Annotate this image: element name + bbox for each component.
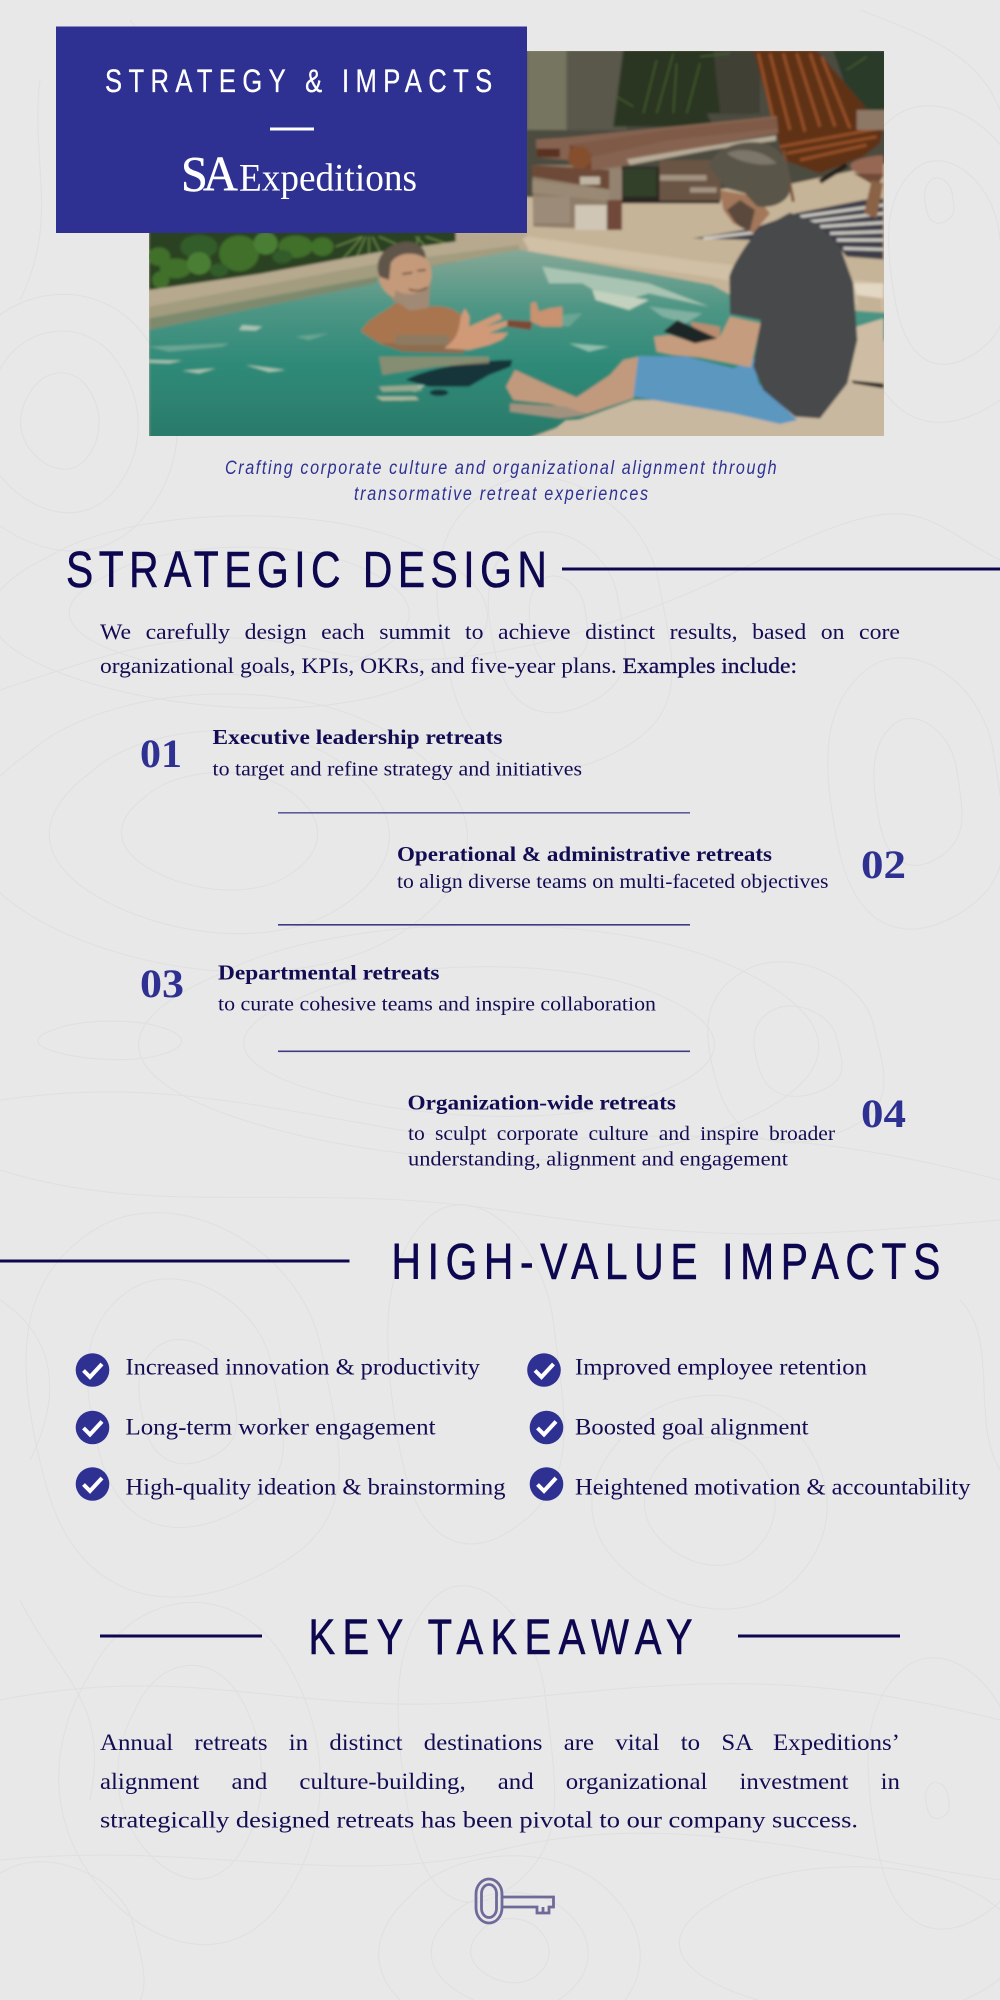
item 04: [408, 1090, 906, 1170]
check: ideation: [76, 1467, 506, 1501]
check: engagement: [76, 1411, 436, 1444]
foreground deck: [528, 378, 884, 436]
item 03: Departmental retreats: [218, 960, 440, 984]
shorts: [633, 356, 797, 424]
stool: [851, 156, 883, 176]
chair: [753, 50, 883, 173]
photo: two men talking at a swimming pool: [148, 50, 896, 440]
check: motivation: Heightened motivation & accountability: [575, 1474, 971, 1500]
ripples: [149, 267, 709, 401]
heading: strategic design: [66, 541, 1000, 598]
key takeaway text: Annual retreats in distinct destinations are vital to SA Expeditions’: [100, 1730, 900, 1755]
leg and foot: [506, 357, 638, 414]
item 01: to target and refine strategy and initiatives: [212, 758, 582, 780]
wall and plants: [500, 50, 887, 197]
check: engagement: Long-term worker engagement: [126, 1414, 436, 1440]
item 01: Executive leadership retreats: [212, 725, 502, 749]
header panel: [56, 26, 527, 233]
pool water: [149, 249, 896, 440]
item 01: 01: [140, 731, 182, 776]
item 02: 02: [861, 842, 906, 887]
check: innovation: Increased innovation & productivity: [126, 1354, 481, 1380]
item 03: [140, 960, 656, 1016]
tablet: [663, 320, 717, 343]
heading: high-value impacts: [0, 1233, 940, 1290]
check: retention: Improved employee retention: [575, 1354, 868, 1380]
reflection: [406, 360, 512, 387]
plants: [149, 230, 456, 290]
check: alignment: [530, 1411, 809, 1444]
item 04: 04: [861, 1091, 906, 1136]
key takeaway text: [100, 1728, 900, 1832]
logo: [181, 146, 417, 202]
icon: key: [476, 1879, 554, 1923]
heading: strategic design: STRATEGIC DESIGN: [66, 541, 547, 598]
heading: key takeaway: KEY TAKEAWAY: [308, 1609, 693, 1665]
shirt: [729, 213, 857, 418]
strategic design intro text: organizational goals, KPIs, OKRs, and five-year plans. Examples include:: [100, 653, 797, 678]
title: STRATEGY & IMPACTS: [105, 64, 492, 100]
bench leg: [532, 165, 622, 230]
item 02: [397, 842, 906, 893]
heading: high-value impacts: HIGH-VALUE IMPACTS: [392, 1233, 940, 1290]
check: alignment: Boosted goal alignment: [575, 1414, 809, 1440]
item 04: understanding, alignment and engagement: [408, 1148, 788, 1170]
logo: Expeditions: [239, 156, 417, 200]
arm and hands: [654, 317, 761, 367]
strategic design intro text: [100, 617, 900, 678]
man in pool: [361, 303, 472, 345]
left coping: [149, 238, 528, 306]
bench top: [536, 116, 778, 171]
check: innovation: [76, 1353, 481, 1387]
back deck and coping: [524, 237, 864, 304]
floor: [608, 162, 884, 314]
item 04: Organization-wide retreats: [408, 1090, 676, 1114]
hands: [444, 308, 508, 350]
check: retention: [527, 1353, 868, 1387]
item 02: to align diverse teams on multi-faceted objectives: [397, 871, 829, 893]
item 03: 03: [140, 961, 184, 1006]
key takeaway text: strategically designed retreats has been pivotal to our company success.: [100, 1808, 858, 1832]
key takeaway text: alignment and culture-building, and organizational investment in: [100, 1769, 900, 1794]
item 02: Operational & administrative retreats: [397, 842, 772, 866]
head: [720, 190, 770, 233]
photo caption: transormative retreat experiences: [354, 483, 648, 504]
bench back leg: [659, 160, 721, 201]
impacts checklist: [76, 1353, 971, 1501]
logo: SA: [181, 146, 238, 202]
item 01: [140, 725, 582, 780]
rug: [693, 198, 883, 259]
check: motivation: [530, 1467, 971, 1501]
strategic design intro text: We carefully design each summit to achieve distinct results, based on core: [100, 619, 900, 644]
photo caption: [225, 457, 777, 504]
check: ideation: High-quality ideation & brainstorming: [126, 1474, 506, 1500]
item 04: to sculpt corporate culture and inspire broader: [408, 1123, 835, 1145]
heading: key takeaway: [100, 1609, 900, 1665]
item 03: to curate cohesive teams and inspire collaboration: [218, 994, 656, 1016]
photo caption: Crafting corporate culture and organizational alignment through: [225, 457, 777, 478]
